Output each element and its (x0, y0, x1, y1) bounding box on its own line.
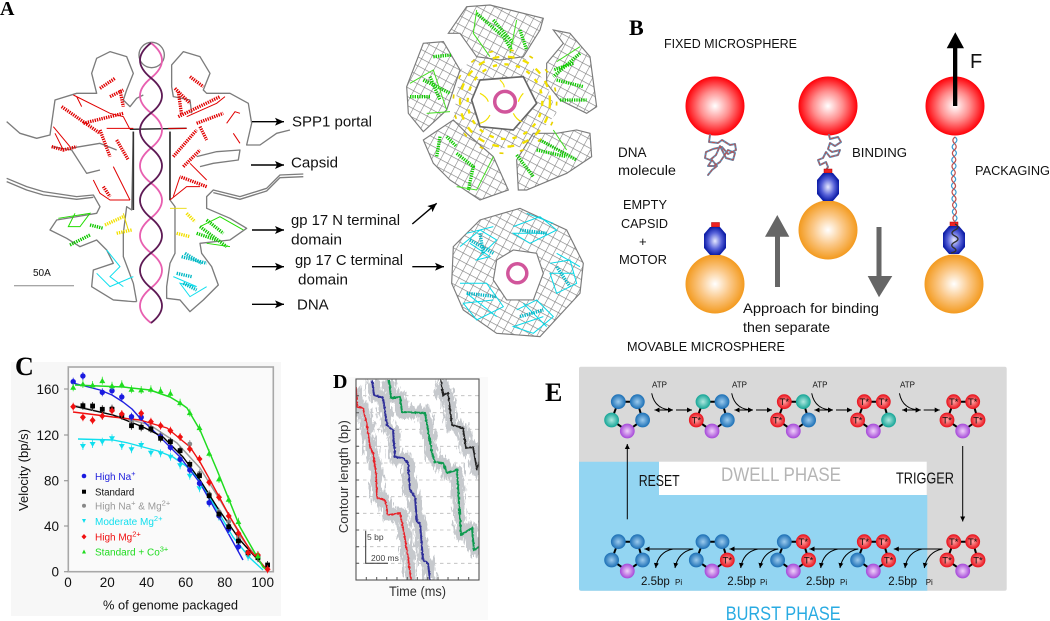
fit curve: green (75, 385, 267, 570)
pentamer bottom 5 (940, 534, 985, 578)
data points: cyan (83, 438, 248, 557)
label DNA molecule: DNA (618, 145, 647, 160)
pentamer bottom 4: T* (884, 555, 894, 566)
label reset: RESET (639, 473, 680, 490)
label fixed microsphere: FIXED MICROSPHERE (664, 36, 797, 51)
label packaging: PACKAGING (975, 163, 1050, 178)
black trace (441, 380, 479, 470)
x axis ticks and labels: 20 (100, 575, 115, 590)
x axis ticks and labels: 80 (217, 575, 232, 590)
legend: standard + Co: 3+ (160, 544, 169, 554)
gray noisy raw traces (356, 380, 479, 580)
reset arrow (626, 444, 628, 519)
scale bar 5 bp, 200 ms (366, 531, 399, 563)
x axis title: % of genome packaged (103, 597, 238, 612)
fit curve: red (73, 412, 267, 570)
legend: high Na and Mg: 2+ (162, 498, 171, 508)
ATP step 2: ATP (732, 380, 747, 389)
data points: gray (83, 406, 258, 558)
y axis title: Velocity (bp/s) (16, 429, 31, 511)
DNA ring, C-terminal view (508, 264, 527, 283)
label approach for binding: then separate (743, 319, 830, 335)
pentamer top 5 (940, 394, 985, 438)
pentamer bottom 2 (689, 534, 735, 578)
pentamer bottom 3: T* (799, 537, 808, 548)
ATP step 2 (732, 380, 772, 410)
label approach for binding (743, 300, 879, 335)
pentamer top 2 (689, 394, 735, 438)
fit curve: blue (73, 383, 243, 560)
legend: moderate Mg: Moderate Mg (95, 517, 154, 528)
label gp 17 N terminal domain: gp 17 N terminal (291, 212, 400, 229)
label Capsid: Capsid (291, 155, 338, 172)
legend: moderate Mg: 2+ (154, 514, 163, 523)
y axis ticks and labels: 80 (44, 474, 59, 488)
pentamer top 4: T* (879, 397, 888, 408)
pentamer bottom 5: T* (973, 555, 983, 566)
data points: green (73, 381, 258, 556)
legend: standard + Co: Standard + Co (95, 548, 160, 558)
label trigger: TRIGGER (896, 470, 954, 487)
dashed grid (356, 396, 479, 563)
label gp 17 C terminal domain (295, 252, 403, 288)
stretched DNA helix (951, 137, 957, 222)
cryo-EM side view wireframe (7, 42, 303, 312)
ATP step 4: ATP (900, 380, 915, 389)
label dwell phase: DWELL PHASE (721, 465, 841, 486)
pentamer bottom 4: T* (879, 537, 888, 548)
burst step 3 arrows and labels: 2.5bp (806, 576, 835, 588)
fit curve: black (73, 406, 267, 570)
legend: high Mg: High Mg (95, 532, 132, 544)
burst step 4 arrows and labels: 2.5bp (888, 576, 917, 588)
trigger arrow (962, 446, 964, 522)
arrow to capsid (251, 164, 284, 166)
y axis ticks and labels: 0 (51, 564, 59, 580)
panel A: portal and gp17 structure (0, 0, 597, 337)
pentamer bottom 1 (604, 534, 650, 578)
fit curve: cyan (78, 439, 263, 570)
trace background (330, 377, 488, 620)
fit curve: gray (73, 405, 267, 570)
red trace (356, 387, 411, 580)
pentamer top 4 (850, 394, 896, 438)
pentamer bottom 5: T* (942, 555, 952, 566)
pentamer top 5: T* (973, 415, 983, 426)
pentamer top 3 (770, 394, 816, 438)
data points: red (73, 407, 268, 569)
burst step 4 arrows and labels (888, 549, 943, 588)
pentamer top 2: T* (692, 415, 701, 426)
pentamer top 5: T* (949, 397, 959, 408)
legend: moderate Mg (82, 514, 163, 528)
panel D: single-molecule traces (333, 375, 480, 599)
label DNA: DNA (297, 296, 329, 313)
white central band (659, 462, 927, 495)
pentamer top 5: T* (968, 397, 978, 408)
blue burst phase background (579, 462, 927, 591)
panel letter C: C (15, 352, 34, 381)
pentamer bottom 4: T* (860, 537, 869, 548)
panel letter D: D (333, 371, 347, 393)
pentamer bottom 3: T* (804, 555, 814, 566)
label gp 17 C terminal domain: gp 17 C terminal (295, 252, 403, 269)
top view: N-terminal ring (407, 5, 597, 200)
burst step 1 arrows and labels: Pi (675, 578, 682, 587)
pentamer top 3: T* (780, 397, 789, 408)
scale bar 5 bp, 200 ms: 200 ms (371, 553, 399, 563)
legend: high Na and Mg: High Na (95, 502, 131, 512)
legend: high Na: + (131, 469, 136, 478)
ATP step 1 (652, 380, 692, 410)
pentamer bottom 5: T* (968, 537, 978, 548)
y axis ticks and labels: 160 (36, 382, 59, 397)
pentamer bottom 3 (770, 534, 816, 578)
label empty capsid plus motor: MOTOR (619, 252, 667, 267)
pentamer top 1 (604, 394, 650, 438)
pentamer top 4: T* (853, 415, 863, 426)
panel B: optical tweezers assay (618, 15, 1050, 354)
motor with packaged DNA (943, 222, 965, 254)
burst step 1 arrows and labels: 2.5bp (641, 576, 670, 588)
plot frame and ticks (356, 379, 479, 580)
blue trace (372, 380, 430, 580)
legend: high Na (82, 469, 136, 483)
label DNA molecule (618, 145, 676, 178)
panel letter B: B (629, 15, 644, 40)
pentamer bottom 4 (850, 534, 896, 578)
label movable microsphere: MOVABLE MICROSPHERE (627, 339, 785, 354)
legend: high Na: High Na (95, 472, 131, 483)
motor on capsid, left (704, 222, 726, 255)
force arrow F (947, 32, 964, 106)
legend: standard + Co (82, 544, 169, 558)
ATP step 3 (812, 380, 852, 410)
y axis title: Contour length (bp) (337, 420, 351, 533)
arrow to DNA (252, 303, 284, 305)
green trace (389, 380, 479, 550)
pentamer bottom 2: T* (723, 555, 732, 566)
legend: standard: Standard (95, 488, 134, 498)
scale bar 5 bp, 200 ms: 5 bp (367, 532, 384, 542)
x axis ticks and labels: 100 (251, 575, 274, 590)
label empty capsid plus motor (619, 197, 668, 267)
label empty capsid plus motor: EMPTY (623, 197, 667, 212)
fixed red microspheres (686, 76, 984, 136)
burst step 2 arrows and labels: Pi (760, 578, 767, 587)
gray dwell phase background (579, 367, 1007, 591)
legend (82, 469, 171, 558)
red portal ribbons (52, 77, 240, 200)
green and yellow N-terminal ribbons (58, 208, 243, 247)
label gp 17 N terminal domain (291, 212, 400, 248)
arrow to gp17 N domain (252, 229, 284, 231)
label empty capsid plus motor: CAPSID (621, 216, 668, 231)
DNA ring, N-terminal view (495, 91, 515, 112)
x axis title: Time (ms) (389, 584, 446, 599)
x axis ticks and labels: 60 (178, 575, 193, 590)
legend: high Na and Mg (82, 498, 171, 512)
cyan C-terminal ribbons (97, 250, 207, 297)
plot interior (356, 379, 479, 580)
pentamer top 3: T* (773, 415, 783, 426)
panel E: mechanochemical cycle (545, 367, 1007, 621)
x axis ticks and labels: 40 (139, 575, 154, 590)
y axis ticks and labels: 120 (36, 428, 59, 443)
ATP step 3: ATP (812, 380, 827, 389)
panel C: velocity chart (11, 352, 281, 616)
pentamer top 5: T* (942, 415, 952, 426)
burst step 1 arrows and labels (641, 549, 693, 588)
pentamer top 4: T* (860, 397, 869, 408)
label DNA molecule: molecule (618, 163, 676, 178)
top view: C-terminal ring (452, 208, 583, 337)
label approach for binding: Approach for binding (743, 300, 879, 316)
burst step 3 arrows and labels (806, 549, 858, 588)
label gp 17 N terminal domain: domain (291, 231, 342, 248)
y axis ticks and labels (36, 382, 68, 580)
label empty capsid plus motor: + (639, 234, 647, 249)
motor on capsid, binding (817, 169, 839, 201)
label SPP1 portal: SPP1 portal (292, 114, 372, 131)
burst step 4 arrows and labels: Pi (926, 578, 933, 587)
gray approach arrow (765, 215, 789, 287)
arrow to SPP1 portal (252, 121, 284, 123)
arrow to C-terminal top view (412, 266, 444, 268)
legend: high Na and Mg: & Mg (136, 502, 162, 512)
label binding: BINDING (852, 145, 907, 160)
burst step 2 arrows and labels (727, 549, 778, 588)
coiled DNA molecule, binding (818, 135, 841, 170)
x axis ticks and labels: 0 (64, 575, 72, 590)
plot frame (68, 367, 273, 572)
legend: high Mg: 2+ (132, 530, 141, 538)
data points: blue (73, 376, 238, 547)
movable orange microspheres (686, 200, 984, 314)
y axis ticks and labels: 40 (44, 519, 59, 534)
pentamer bottom 5: T* (949, 537, 959, 548)
coiled DNA molecule, left (705, 135, 736, 175)
data points: black (83, 406, 268, 565)
scale bar 50A: 50A (33, 268, 51, 279)
burst step 3 arrows and labels: Pi (840, 578, 847, 587)
ATP step 1: ATP (652, 380, 667, 389)
arrow to gp17 C domain (252, 266, 284, 268)
legend: high Mg (82, 530, 141, 544)
legend: high Na and Mg: + (131, 498, 136, 508)
scale bar 50A (14, 268, 74, 286)
gray separate arrow (868, 227, 892, 297)
panel letter E: E (545, 378, 562, 407)
ATP step 4 (899, 380, 940, 410)
label F: F (970, 51, 982, 73)
arrow to N-terminal top view (412, 203, 437, 224)
DNA double helix (140, 43, 162, 323)
label gp 17 C terminal domain: domain (298, 271, 348, 288)
burst step 2 arrows and labels: 2.5bp (727, 576, 756, 588)
chart background (11, 362, 281, 616)
x axis ticks and labels (64, 575, 274, 590)
